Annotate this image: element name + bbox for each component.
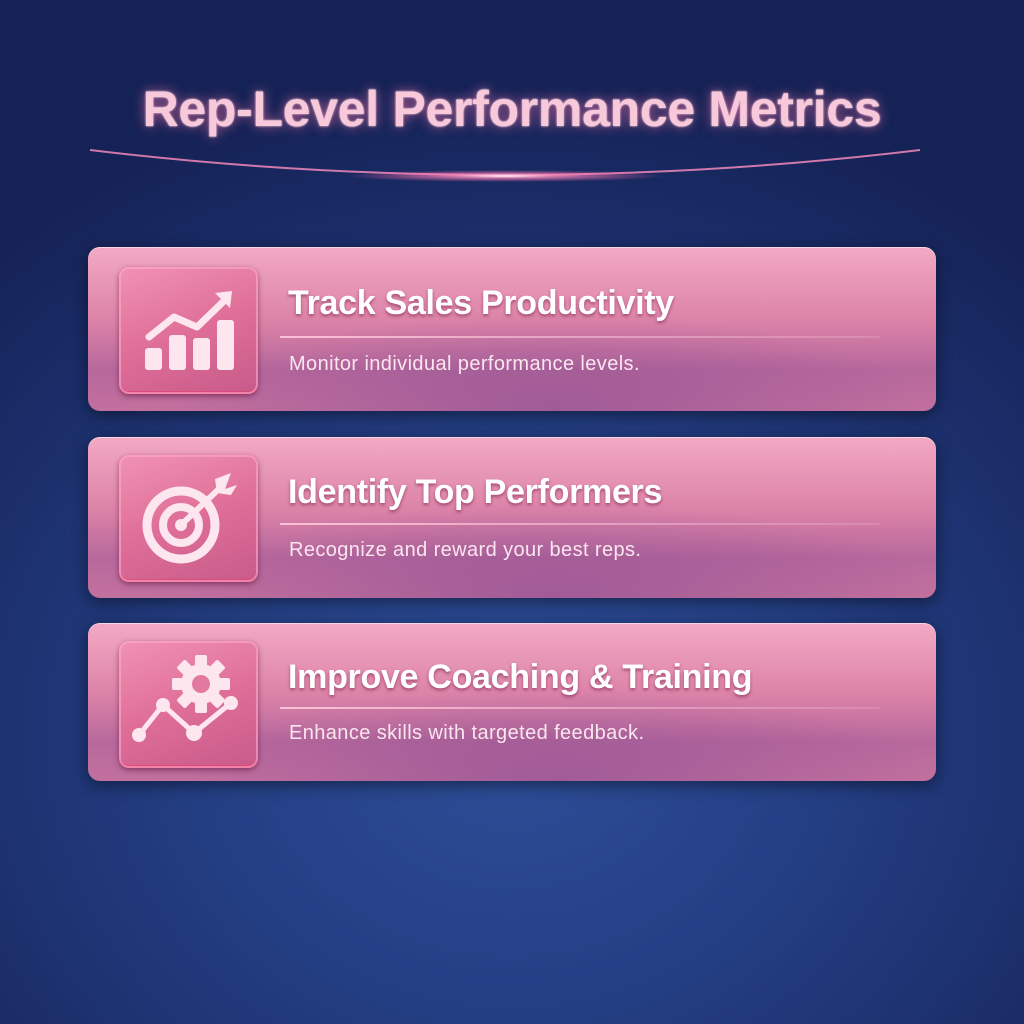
text: Recognize and reward your best reps.	[289, 539, 641, 561]
panel: identify top performers	[88, 437, 936, 598]
icon: bar chart with arrow	[119, 267, 258, 394]
text: Enhance skills with targeted feedback.	[289, 722, 644, 744]
heading: Improve Coaching & Training	[288, 658, 752, 696]
icon: gear with line graph	[119, 641, 258, 768]
panel: track sales productivity	[88, 247, 936, 411]
text: Monitor individual performance levels.	[289, 353, 640, 375]
heading: Track Sales Productivity	[288, 284, 674, 322]
title: Rep-Level Performance Metrics	[143, 81, 881, 137]
title underline glow	[90, 149, 920, 182]
heading: Identify Top Performers	[288, 473, 662, 511]
icon: target with arrow	[119, 455, 258, 582]
panel: improve coaching & training	[88, 623, 936, 781]
